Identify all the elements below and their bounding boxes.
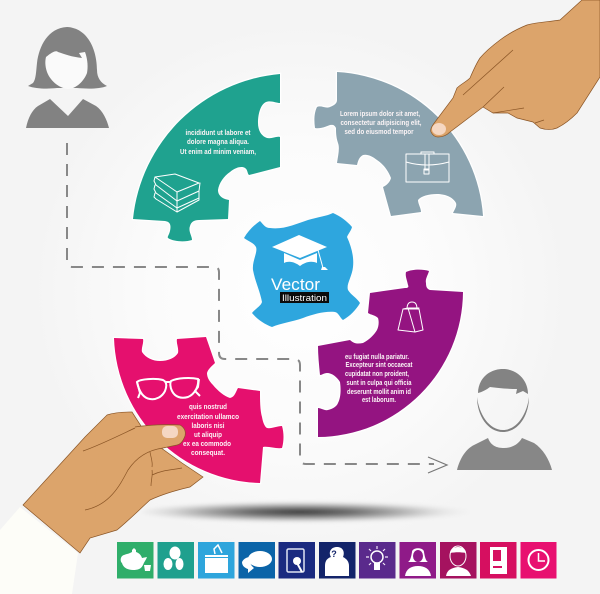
icon tile: clock xyxy=(520,542,556,578)
icon: shopping bag xyxy=(398,302,423,332)
text: pink copy: laboris nisi xyxy=(192,422,225,430)
dashed connector with arrow xyxy=(67,143,447,473)
text: purple copy: Excepteur sint occaecat xyxy=(346,361,413,369)
text: purple copy: sunt in culpa qui officia xyxy=(346,379,412,387)
icon tile: phone xyxy=(480,542,516,578)
text: pink copy: ex ea commodo xyxy=(183,440,232,448)
text: purple copy xyxy=(345,353,413,404)
icon tile: woman xyxy=(400,542,436,578)
panel: purple puzzle piece xyxy=(318,270,463,437)
text: purple copy: eu fugiat nulla pariatur. xyxy=(345,353,409,361)
ground shadow xyxy=(142,501,478,523)
text: purple copy: deserunt mollit anim id xyxy=(347,388,411,396)
icon: graduation cap xyxy=(272,235,328,270)
holding hand palm behind the piece xyxy=(23,412,203,553)
text: pink copy: exercitation ullamco xyxy=(177,413,240,421)
text: grey copy: sed do eiusmod tempor xyxy=(344,128,414,136)
text: teal copy xyxy=(180,129,256,156)
icon tile: man xyxy=(440,542,476,578)
text: grey copy: consectetur adipisicing elit, xyxy=(340,119,422,127)
text: teal copy: incididunt ut labore et xyxy=(186,129,251,137)
text: pink copy xyxy=(177,403,240,457)
thumb over the piece xyxy=(83,425,185,510)
fingernail xyxy=(432,123,446,135)
icon tile: light bulb xyxy=(359,542,396,578)
text: pink copy: ut aliquip xyxy=(194,431,223,439)
icon tile: balloons xyxy=(158,542,194,578)
icon strip xyxy=(117,542,556,578)
icon tile: gift box xyxy=(198,542,234,578)
icon tile: tablet touch xyxy=(278,542,315,578)
icon: man avatar xyxy=(457,369,552,470)
pointing hand xyxy=(431,0,600,137)
text: Vector: Vector xyxy=(271,276,321,294)
text: teal copy: Ut enim ad minim veniam, xyxy=(180,148,256,156)
icon tile: speech bubbles xyxy=(238,542,275,578)
icon: briefcase xyxy=(406,152,449,182)
panel: teal puzzle piece xyxy=(133,74,280,241)
sleeve xyxy=(0,507,78,594)
text: purple copy: est laborum. xyxy=(362,396,396,404)
icon tile: teapot xyxy=(117,542,154,578)
icon: glasses xyxy=(137,378,200,399)
thumbnail xyxy=(162,426,178,438)
panel: grey puzzle piece xyxy=(314,72,483,216)
text: pink copy: quis nostrud xyxy=(189,403,227,411)
text: pink copy: consequat. xyxy=(191,449,225,457)
icon tile: person question: ? xyxy=(331,549,337,559)
text: grey copy: Lorem ipsum dolor sit amet, xyxy=(340,110,420,118)
icon: books xyxy=(154,174,200,212)
text: Illustration label: Illustration xyxy=(282,293,327,304)
text: grey copy xyxy=(340,110,422,136)
text: teal copy: dolore magna aliqua. xyxy=(187,138,249,146)
icon: woman avatar xyxy=(26,27,109,128)
panel: pink puzzle piece xyxy=(114,337,284,483)
panel: blue centre puzzle piece xyxy=(244,213,360,327)
icon tile: person question xyxy=(319,542,356,578)
text: purple copy: cupidatat non proident, xyxy=(345,370,409,378)
